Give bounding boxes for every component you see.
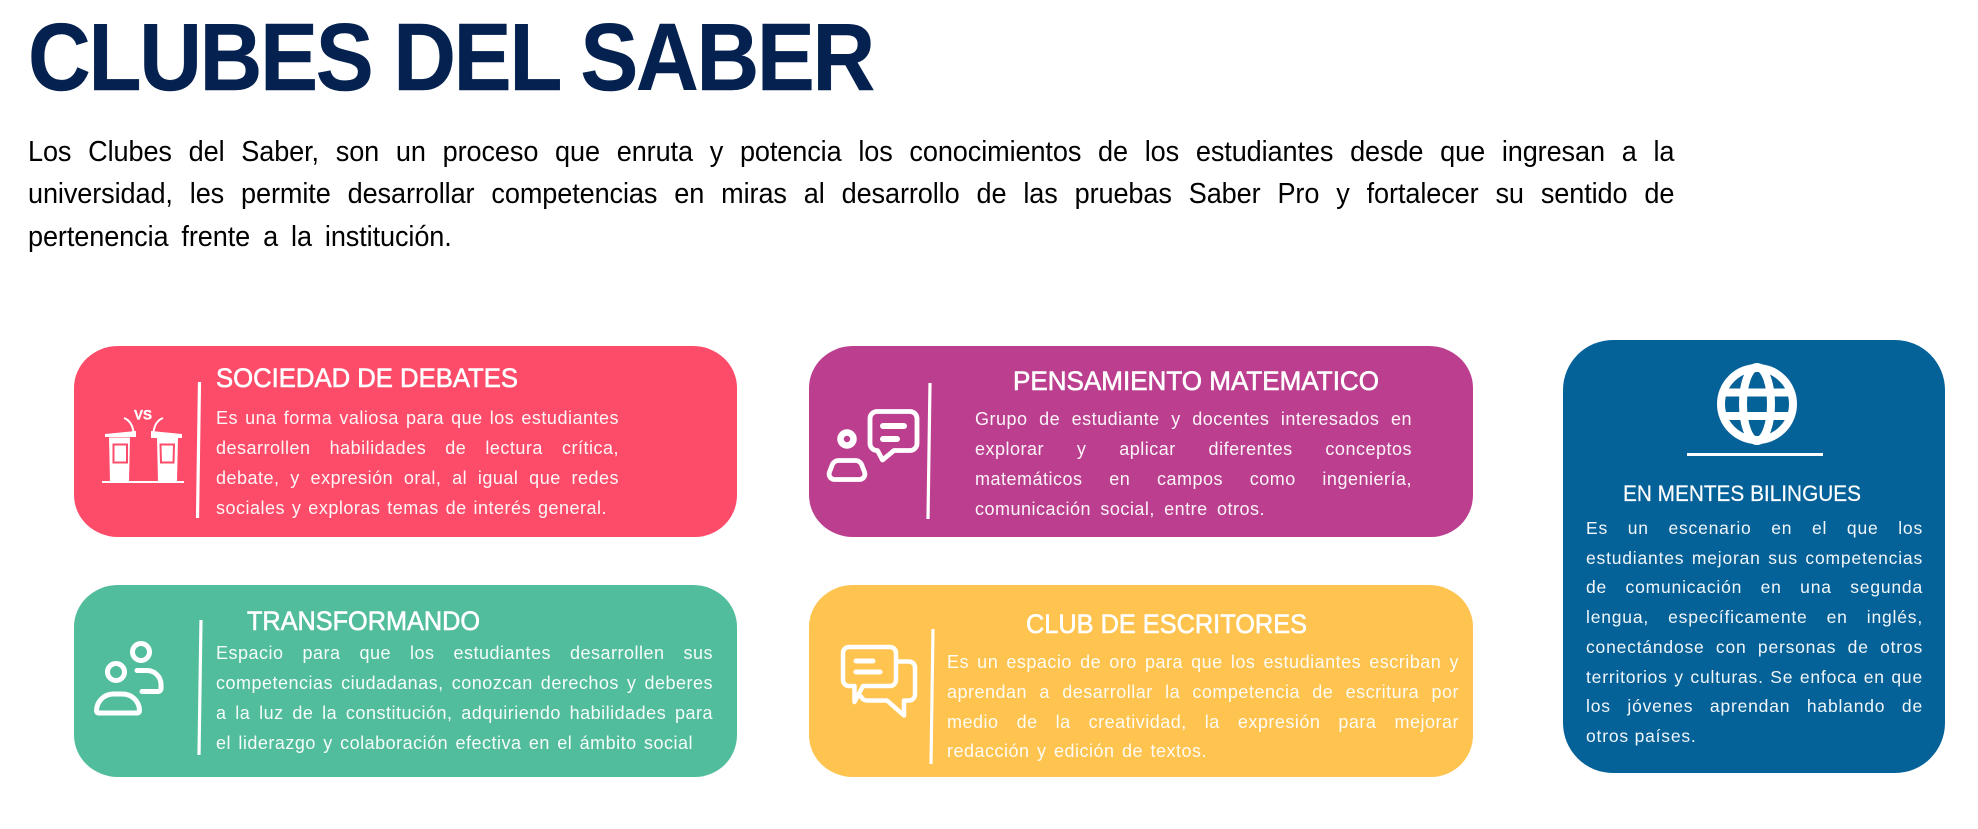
body text: lengua, específicamente en inglés, bbox=[1586, 607, 1923, 627]
heading: SOCIEDAD DE DEBATES bbox=[216, 363, 518, 393]
body text: territorios y culturas. Se enfoca en que bbox=[1586, 667, 1923, 687]
icon: chat bubbles bbox=[840, 644, 918, 718]
body text bbox=[1586, 518, 1923, 746]
body text: medio de la creatividad, la expresión para mejorar bbox=[947, 712, 1459, 732]
divider bbox=[197, 620, 203, 755]
icon: person with speech bubble bbox=[826, 409, 920, 482]
body text: Es una forma valiosa para que los estudiantes bbox=[216, 408, 619, 428]
body text bbox=[216, 643, 713, 753]
body text: de comunicación en una segunda bbox=[1586, 577, 1923, 597]
heading: TRANSFORMANDO bbox=[247, 606, 480, 636]
divider bbox=[926, 383, 932, 519]
body text: conectándose con personas de otros bbox=[1586, 637, 1923, 657]
intro paragraph: universidad, les permite desarrollar competencias en miras al desarrollo de las pruebas Saber Pro y fortalecer su sentido de bbox=[28, 178, 1674, 210]
body text: redacción y edición de textos. bbox=[947, 741, 1207, 761]
body text bbox=[975, 409, 1412, 519]
body text: Espacio para que los estudiantes desarrollen sus bbox=[216, 643, 713, 663]
body text: comunicación social, entre otros. bbox=[975, 499, 1265, 519]
body text: desarrollen habilidades de lectura crítica, bbox=[216, 438, 619, 458]
panel: en mentes bilingues bbox=[1563, 340, 1945, 773]
body text: Grupo de estudiante y docentes interesados en bbox=[975, 409, 1412, 429]
body text: sociales y exploras temas de interés general. bbox=[216, 498, 607, 518]
body text: otros países. bbox=[1586, 726, 1697, 746]
body text: los jóvenes aprendan hablando de bbox=[1586, 696, 1923, 716]
icon: two people bbox=[94, 641, 164, 716]
intro paragraph: pertenencia frente a la institución. bbox=[28, 220, 452, 252]
body text: explorar y aplicar diferentes conceptos bbox=[975, 439, 1412, 459]
body text bbox=[947, 652, 1459, 761]
body text: el liderazgo y colaboración efectiva en el ámbito social bbox=[216, 733, 693, 753]
intro paragraph bbox=[28, 136, 1674, 252]
body text: Es un escenario en el que los bbox=[1586, 518, 1923, 538]
body text: debate, y expresión oral, al igual que redes bbox=[216, 468, 619, 488]
icon: globe bbox=[1717, 363, 1797, 445]
icon: debate podiums: VS bbox=[134, 408, 152, 422]
divider bbox=[1687, 453, 1823, 456]
heading: PENSAMIENTO MATEMATICO bbox=[1013, 366, 1379, 396]
body text: a la luz de la constitución, adquiriendo habilidades para bbox=[216, 703, 713, 723]
intro paragraph: Los Clubes del Saber, son un proceso que enruta y potencia los conocimientos de los estudiantes desde que ingresan a la bbox=[28, 136, 1674, 168]
panel: sociedad de debates bbox=[74, 346, 737, 537]
body text: competencias ciudadanas, conozcan derechos y deberes bbox=[216, 673, 713, 693]
heading: CLUB DE ESCRITORES bbox=[1026, 609, 1307, 639]
body text: estudiantes mejoran sus competencias bbox=[1586, 548, 1923, 568]
body text: aprendan a desarrollar la competencia de escritura por bbox=[947, 682, 1459, 702]
body text: Es un espacio de oro para que los estudiantes escriban y bbox=[947, 652, 1459, 672]
divider bbox=[929, 629, 935, 764]
panel: transformando bbox=[74, 585, 737, 777]
body text: matemáticos en campos como ingeniería, bbox=[975, 469, 1412, 489]
panel: club de escritores bbox=[809, 585, 1473, 777]
icon: debate podiums bbox=[102, 408, 184, 483]
body text bbox=[216, 408, 619, 518]
panel: pensamiento matematico bbox=[809, 346, 1473, 537]
divider bbox=[196, 382, 202, 518]
heading: EN MENTES BILINGUES bbox=[1623, 481, 1861, 506]
